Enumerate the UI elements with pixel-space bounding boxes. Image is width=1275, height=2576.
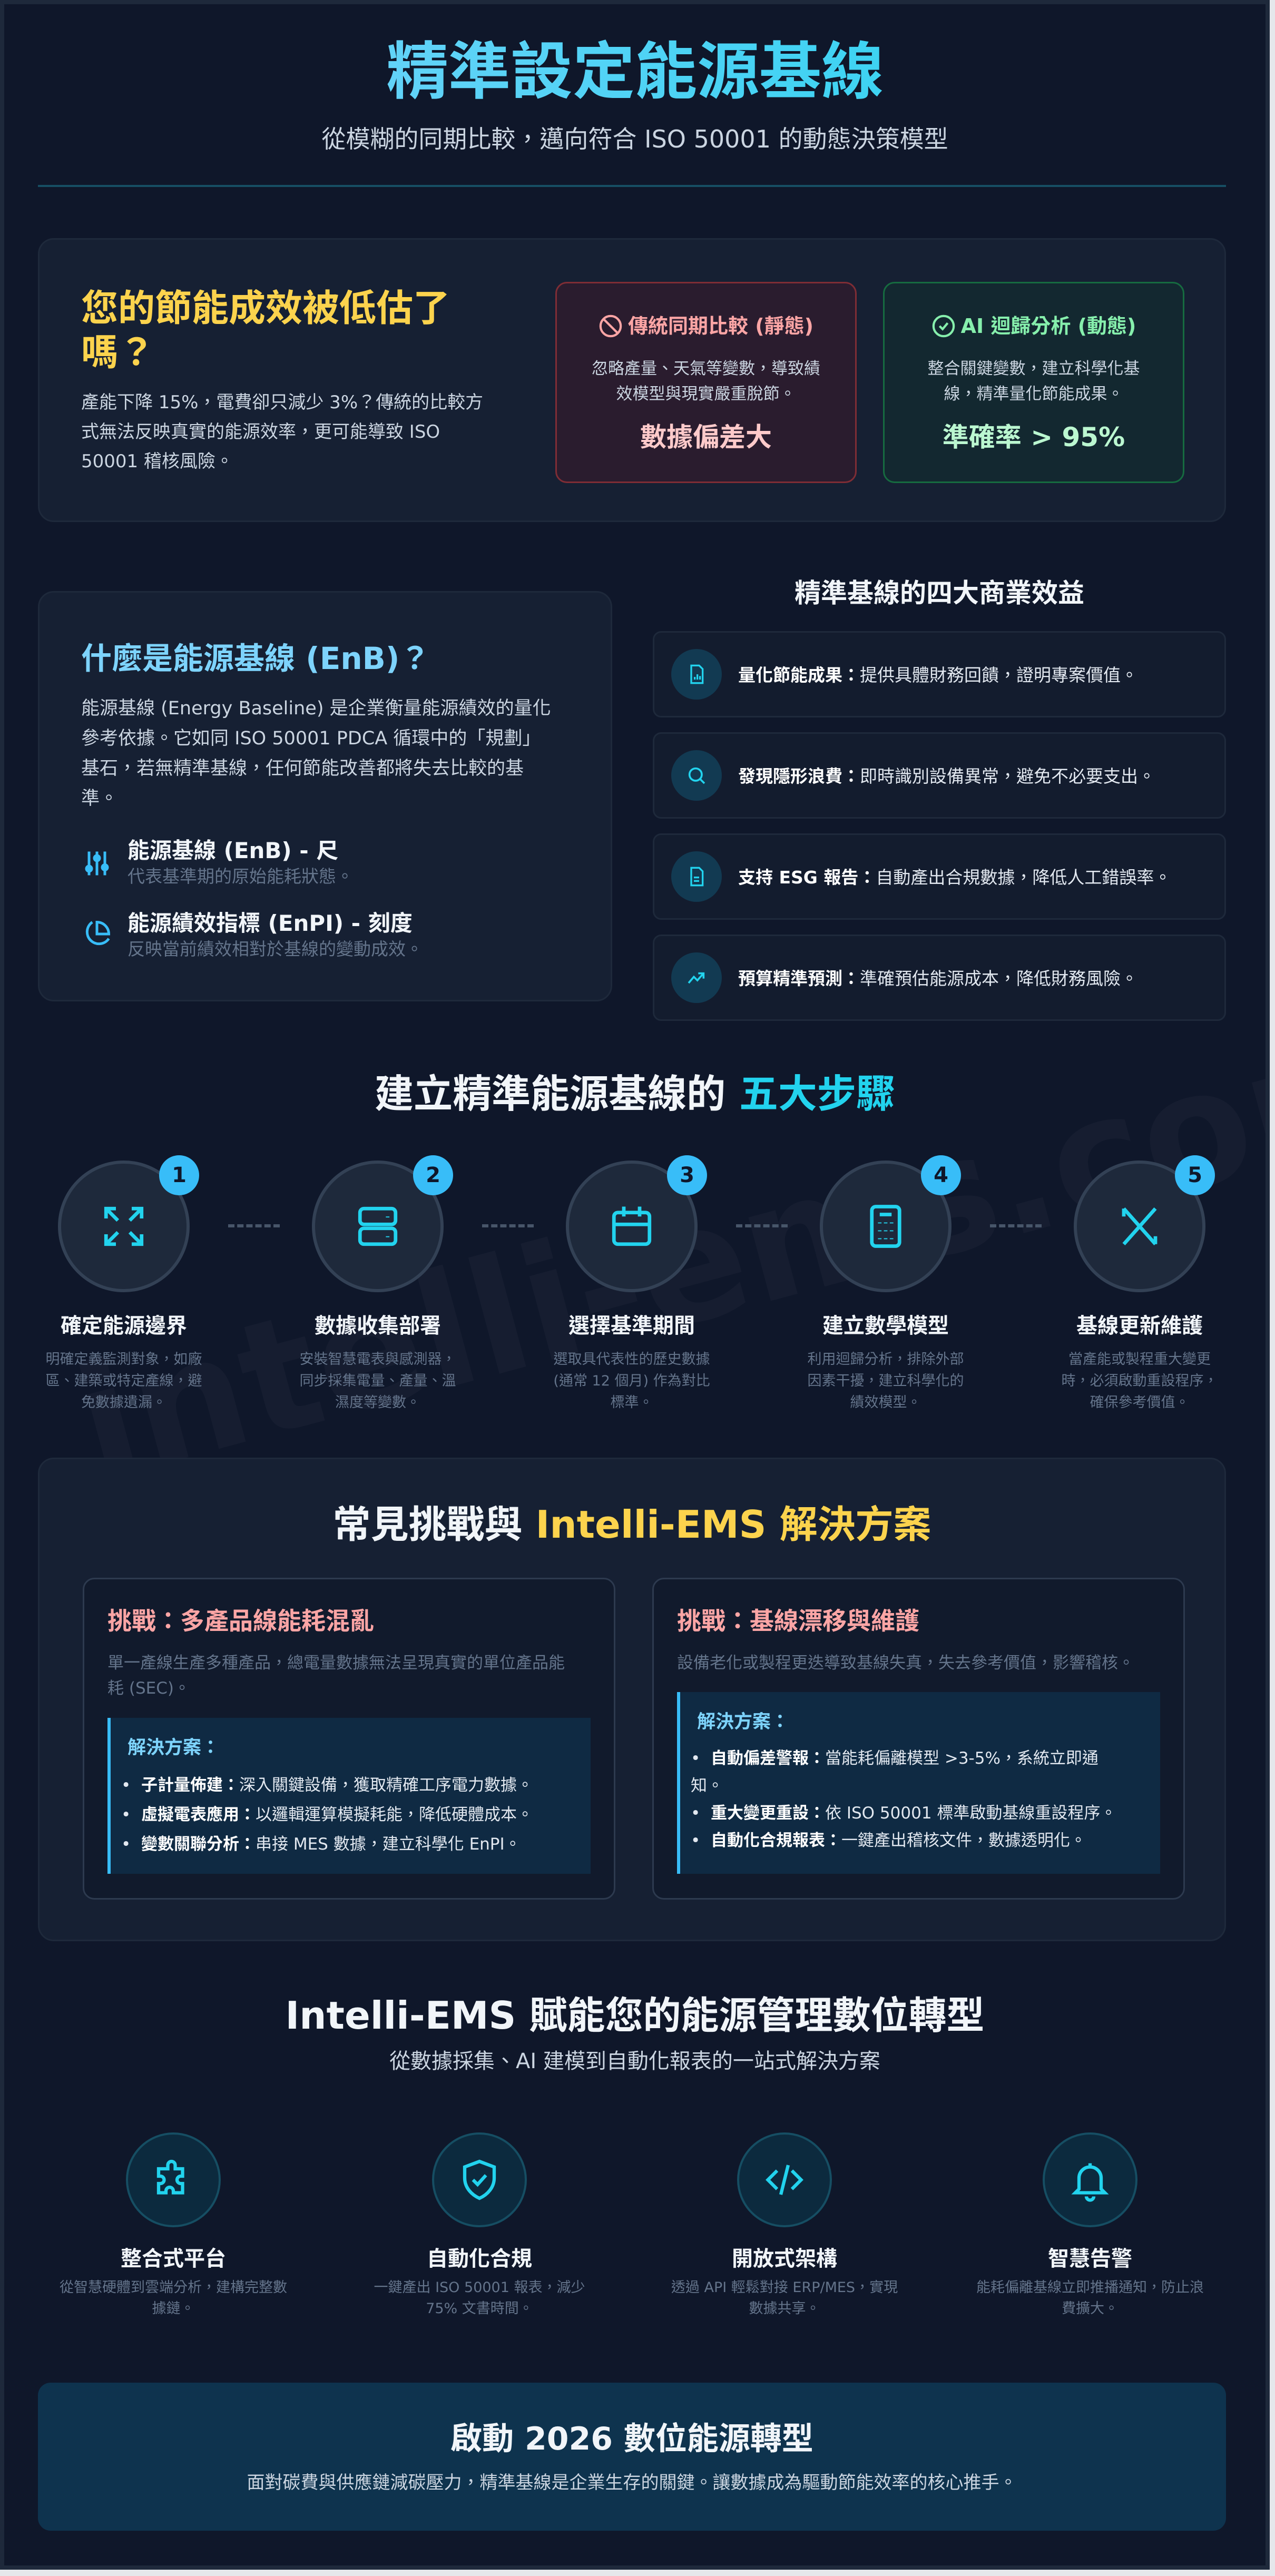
badge — [159, 1155, 199, 1195]
card: baseline drift — [652, 1578, 1185, 1900]
subtitle: 從模糊的同期比較，邁向符合 ISO 50001 的動態決策模型 — [321, 125, 948, 153]
heading: underestimated — [81, 287, 450, 374]
badge — [921, 1155, 961, 1195]
paragraph: 參考依據。它如同 ISO 50001 PDCA 循環中的「規劃」 — [81, 728, 541, 749]
panel: underestimated savings — [38, 238, 1226, 522]
step 1: 明確定義監測對象，如廠 — [45, 1351, 202, 1368]
step 4: 因素干擾，建立科學化的 — [807, 1373, 964, 1389]
solution box: • 子計量佈建：深入關鍵設備，獲取精確工序電力數據。 — [121, 1776, 533, 1795]
step 3: 選取具代表性的歷史數據 — [553, 1351, 710, 1368]
text: intro — [81, 392, 483, 472]
card: multi product: 挑戰：多產品線能耗混亂 — [107, 1607, 374, 1635]
step 4: 績效模型。 — [850, 1394, 921, 1411]
card: multi product: 單一產線生產多種產品，總電量數據無法呈現真實的單位產品能 — [107, 1654, 565, 1673]
paragraph: 基石，若無精準基線，任何節能改善都將失去比較的基 — [81, 758, 524, 779]
item: EnB ruler: 代表基準期的原始能耗狀態。 — [127, 866, 354, 887]
icon circle — [820, 1161, 952, 1292]
heading with icon: 傳統同期比較 (靜態) — [628, 314, 813, 338]
badge: 3 — [680, 1163, 694, 1187]
item: EnPI scale: 反映當前績效相對於基線的變動成效。 — [127, 939, 423, 959]
feature: smart alerts: 智慧告警 — [1048, 2247, 1132, 2271]
solution box: • 虛擬電表應用：以邏輯運算模擬耗能，降低硬體成本。 — [121, 1805, 533, 1824]
icon: pie — [85, 921, 110, 945]
text: 整合關鍵變數，建立科學化基 — [927, 359, 1140, 378]
callout: CTA — [38, 2383, 1226, 2531]
badge — [413, 1155, 453, 1195]
stat: 準確率 > 95% — [943, 422, 1125, 453]
benefit 3 — [653, 833, 1226, 920]
feature: integrated platform: 據鏈。 — [152, 2300, 195, 2317]
step 3: 選擇基準期間 — [568, 1314, 695, 1338]
feature: open architecture: 數據共享。 — [749, 2300, 820, 2317]
icon: document — [671, 851, 722, 902]
solution box: 解決方案： — [697, 1712, 789, 1733]
solution box: 知。 — [691, 1776, 723, 1795]
step 4 — [807, 1155, 964, 1411]
heading: 什麼是能源基線 (EnB)？ — [81, 641, 430, 676]
card: multi product — [83, 1578, 615, 1900]
solution box: • 自動化合規報表：一鍵產出稽核文件，數據透明化。 — [691, 1831, 1086, 1850]
step 1 — [45, 1155, 202, 1411]
icon circle — [312, 1161, 444, 1292]
callout: CTA: 啟動 2026 數位能源轉型 — [450, 2421, 813, 2457]
item: EnPI scale — [85, 910, 423, 959]
solution box — [107, 1718, 591, 1874]
paragraph — [81, 698, 551, 809]
benefit 1 — [653, 631, 1226, 717]
benefit 3: 支持 ESG 報告：自動產出合規數據，降低人工錯誤率。 — [738, 867, 1171, 888]
benefit 2 — [653, 732, 1226, 819]
benefit 2: 發現隱形浪費：即時識別設備異常，避免不必要支出。 — [738, 766, 1155, 786]
heading: underestimated: 嗎？ — [81, 331, 155, 374]
feature: compliance — [374, 2132, 585, 2317]
heading: four benefits: 精準基線的四大商業效益 — [795, 578, 1084, 608]
step 4: 利用迴歸分析，排除外部 — [807, 1351, 964, 1368]
text: intro: 產能下降 15%，電費卻只減少 3%？傳統的比較方 — [81, 392, 483, 413]
text — [927, 359, 1140, 404]
subheading: 從數據採集、AI 建模到自動化報表的一站式解決方案 — [389, 2049, 880, 2073]
step 4: 建立數學模型 — [822, 1314, 949, 1338]
step 5 — [1061, 1155, 1218, 1411]
text — [592, 359, 820, 404]
icon: sliders — [85, 851, 109, 876]
card: baseline drift: 挑戰：基線漂移與維護 — [677, 1607, 919, 1635]
badge: 4 — [934, 1163, 948, 1187]
item: EnPI scale: 能源績效指標 (EnPI) - 刻度 — [127, 910, 413, 936]
step 5: 確保參考價值。 — [1090, 1394, 1190, 1411]
step 2: 濕度等變數。 — [335, 1394, 420, 1411]
icon: search — [671, 750, 722, 801]
card: AI — [883, 282, 1184, 483]
text: intro: 50001 稽核風險。 — [81, 451, 233, 472]
benefit 4 — [653, 935, 1226, 1021]
step 1: 區、建築或特定產線，避 — [45, 1373, 202, 1389]
solution box: • 重大變更重設：依 ISO 50001 標準啟動基線重設程序。 — [691, 1804, 1116, 1823]
feature: smart alerts: 費擴大。 — [1062, 2300, 1119, 2317]
title: 精準設定能源基線 — [386, 35, 884, 108]
feature: smart alerts: 能耗偏離基線立即推播通知，防止浪 — [976, 2279, 1204, 2296]
step 3 — [553, 1155, 710, 1411]
step 1: 免數據遺漏。 — [81, 1394, 166, 1411]
feature: integrated platform: 從智慧硬體到雲端分析，建構完整數 — [60, 2279, 287, 2296]
feature: open architecture: 透過 API 輕鬆對接 ERP/MES，實現 — [671, 2279, 898, 2296]
heading: five steps: 建立精準能源基線的 五大步驟 — [375, 1071, 895, 1117]
item: EnB ruler: 能源基線 (EnB) - 尺 — [127, 838, 338, 863]
benefit 4: 預算精準預測：準確預估能源成本，降低財務風險。 — [738, 968, 1138, 989]
feature: open architecture: 開放式架構 — [732, 2247, 837, 2271]
text: 線，精準量化節能成果。 — [944, 385, 1123, 404]
badge — [1175, 1155, 1215, 1195]
solution box — [677, 1692, 1160, 1874]
step 5: 基線更新維護 — [1076, 1314, 1203, 1338]
solution box: • 變數關聯分析：串接 MES 數據，建立科學化 EnPI。 — [121, 1835, 521, 1854]
step 2: 同步採集電量、產量、溫 — [299, 1373, 456, 1389]
stat: 數據偏差大 — [640, 422, 772, 453]
panel: what is EnB — [38, 591, 612, 1001]
feature: integrated platform: 整合式平台 — [121, 2247, 226, 2271]
step 3: (通常 12 個月) 作為對比 — [553, 1373, 710, 1389]
step 2: 數據收集部署 — [315, 1314, 441, 1338]
step 3: 標準。 — [610, 1394, 653, 1411]
connectors — [228, 1224, 280, 1227]
feature: compliance: 一鍵產出 ISO 50001 報表，減少 — [374, 2279, 585, 2296]
feature: compliance: 自動化合規 — [427, 2247, 532, 2271]
card: baseline drift: 設備老化或製程更迭導致基線失真，失去參考價值，影響稽核。 — [677, 1654, 1134, 1673]
heading: 常見挑戰與 Intelli-EMS 解決方案 — [332, 1502, 931, 1547]
title — [4, 35, 1266, 109]
icon circle — [58, 1161, 190, 1292]
badge — [667, 1155, 707, 1195]
benefit 1: 量化節能成果：提供具體財務回饋，證明專案價值。 — [738, 665, 1138, 685]
badge: 5 — [1188, 1163, 1202, 1187]
heading: digital transformation: Intelli-EMS 賦能您的能源管理數位轉型 — [286, 1993, 984, 2038]
step 5: 當產能或製程重大變更 — [1068, 1351, 1211, 1368]
icon circle — [566, 1161, 698, 1292]
paragraph: 能源基線 (Energy Baseline) 是企業衡量能源績效的量化 — [81, 698, 551, 719]
solution box: 解決方案： — [127, 1737, 220, 1758]
icon: file chart — [671, 649, 722, 700]
heading: underestimated: 您的節能成效被低估了 — [81, 287, 450, 330]
heading with icon: AI 迴歸分析 (動態) — [961, 314, 1136, 338]
card: traditional — [555, 282, 857, 483]
card: multi product: 耗 (SEC)。 — [107, 1679, 190, 1698]
feature: open architecture — [671, 2132, 898, 2317]
badge: 2 — [426, 1163, 440, 1187]
item: EnB ruler — [85, 838, 354, 887]
badge: 1 — [172, 1163, 187, 1187]
step 1: 確定能源邊界 — [61, 1314, 187, 1338]
text: 忽略產量、天氣等變數，導致績 — [592, 359, 820, 378]
icon: trend — [671, 952, 722, 1003]
text: 效模型與現實嚴重脫節。 — [616, 385, 796, 404]
step 5: 時，必須啟動重設程序， — [1061, 1373, 1218, 1389]
icon circle — [1074, 1161, 1205, 1292]
panel: challenges and solutions — [38, 1458, 1226, 1941]
paragraph: 準。 — [81, 788, 118, 809]
callout: CTA: 面對碳費與供應鏈減碳壓力，精準基線是企業生存的關鍵。讓數據成為驅動節能效率的核心推手。 — [247, 2472, 1017, 2493]
step 2: 安裝智慧電表與感測器， — [299, 1351, 456, 1368]
feature: compliance: 75% 文書時間。 — [426, 2300, 533, 2317]
solution box: • 自動偏差警報：當能耗偏離模型 >3-5%，系統立即通 — [691, 1749, 1099, 1768]
feature: integrated platform — [60, 2132, 287, 2317]
feature: smart alerts — [976, 2132, 1204, 2317]
benefit list — [653, 631, 1226, 1021]
step 2 — [299, 1155, 456, 1411]
text: intro: 式無法反映真實的能源效率，更可能導致 ISO — [81, 421, 440, 443]
